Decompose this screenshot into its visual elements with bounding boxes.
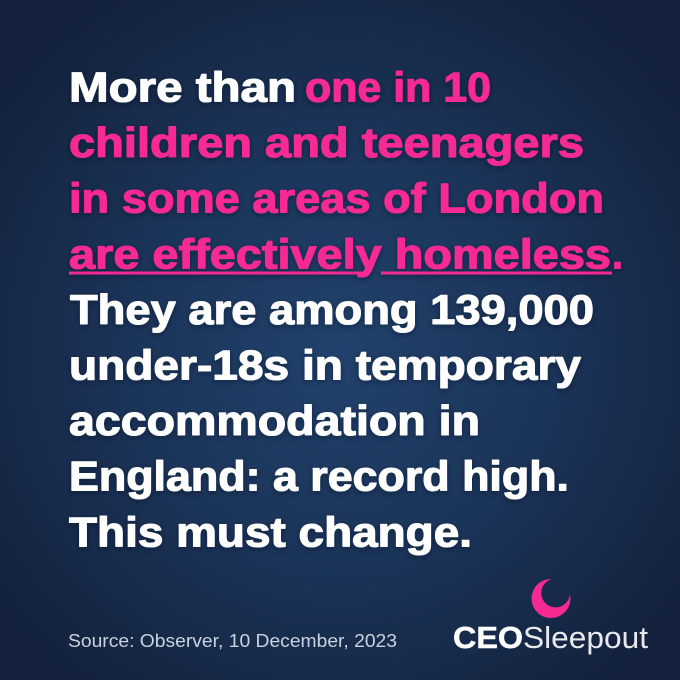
source note: Source: Observer, 10 December, 2023	[68, 631, 397, 651]
line 8: England: a record high.: England: a record high.	[69, 453, 569, 500]
line 4: are effectively homeless, underlined: .	[612, 230, 623, 277]
logo wordmark: CEO	[453, 620, 523, 655]
line 9: this must change.: This must change.	[69, 508, 472, 555]
icon: crescent moon	[532, 579, 571, 618]
logo: CEO Sleepout	[453, 579, 648, 655]
line 1: more than one in 10	[69, 64, 491, 110]
line 6: under-18s in temporary: under-18s in temporary	[69, 342, 581, 388]
logo wordmark	[453, 620, 648, 655]
line 2: children and teenagers: children and teenagers	[69, 119, 584, 166]
headline statement	[69, 64, 623, 555]
line 1: more than one in 10: one in 10	[305, 64, 491, 110]
line 1: more than one in 10: More than	[69, 64, 296, 110]
line 3: in some areas of London: in some areas of London	[69, 175, 604, 222]
line 4: are effectively homeless, underlined: are effectively homeless	[69, 230, 611, 277]
logo wordmark: Sleepout	[523, 620, 648, 655]
line 5: they are among 139,000: They are among 139,000	[70, 286, 594, 333]
line 7: accommodation in: accommodation in	[69, 397, 480, 444]
